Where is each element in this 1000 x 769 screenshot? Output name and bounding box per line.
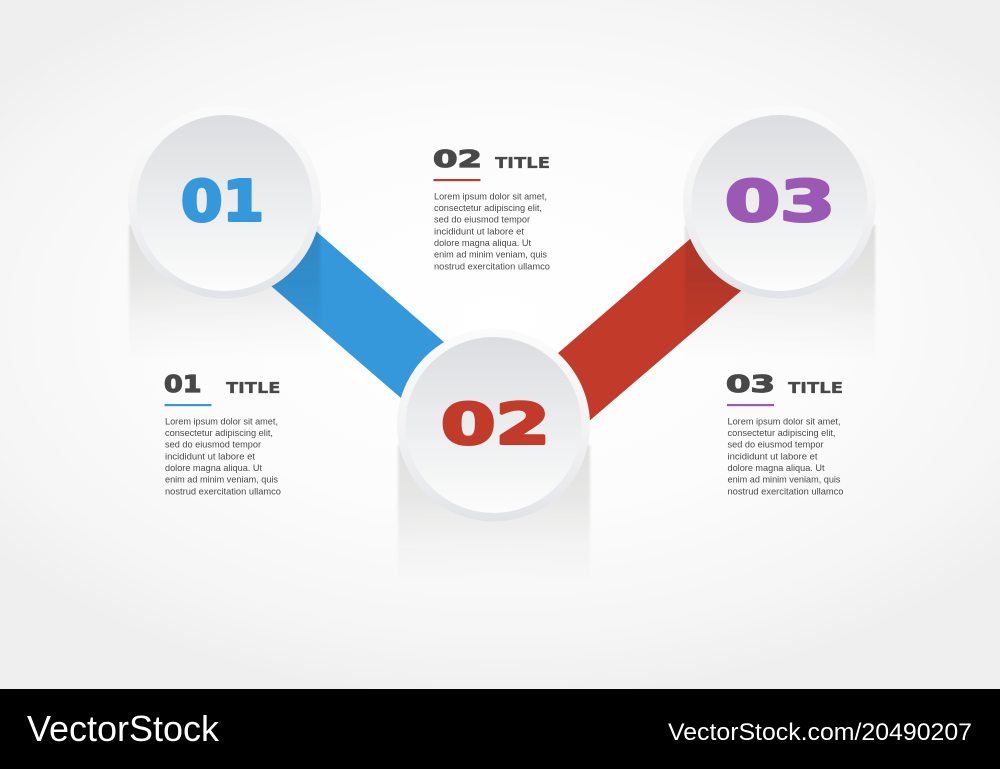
red connector band bbox=[535, 220, 763, 440]
body text 02: sed do eiusmod tempor bbox=[434, 215, 530, 225]
number 01: 01 bbox=[181, 170, 264, 234]
body text 02: enim ad minim veniam, quis bbox=[434, 250, 547, 260]
text block 01 bbox=[164, 370, 281, 496]
body text 03: consectetur adipiscing elit, bbox=[728, 428, 836, 438]
text block 03 bbox=[726, 370, 844, 496]
body text 02: Lorem ipsum dolor sit amet, bbox=[434, 192, 547, 202]
body text 02: consectetur adipiscing elit, bbox=[434, 203, 542, 213]
circle 03 bbox=[683, 106, 876, 298]
body text 01: dolore magna aliqua. Ut bbox=[165, 463, 262, 473]
body text 02: nostrud exercitation ullamco bbox=[434, 261, 550, 271]
body text 03: nostrud exercitation ullamco bbox=[728, 486, 844, 496]
underline 02 bbox=[434, 179, 480, 181]
heading number 03: 03 bbox=[726, 370, 775, 398]
body text 01: Lorem ipsum dolor sit amet, bbox=[165, 416, 278, 426]
body text 02 bbox=[434, 192, 550, 271]
circle 01 bbox=[128, 106, 321, 298]
body text 03 bbox=[728, 416, 844, 496]
shadow: circle 03 bbox=[685, 225, 875, 360]
heading number 01: 01 bbox=[164, 370, 202, 398]
body text 01: nostrud exercitation ullamco bbox=[165, 486, 281, 496]
footer logo text: VectorStock bbox=[27, 708, 220, 749]
footer url text: VectorStock.com/20490207 bbox=[668, 719, 972, 746]
body text 03: dolore magna aliqua. Ut bbox=[728, 463, 825, 473]
body text 01 bbox=[165, 416, 281, 496]
body text 02: incididunt ut labore et bbox=[434, 226, 524, 236]
heading number 02: 02 bbox=[433, 145, 482, 173]
text block 02 bbox=[433, 145, 550, 271]
body text 02: dolore magna aliqua. Ut bbox=[434, 238, 531, 248]
heading title 01: TITLE bbox=[226, 379, 280, 397]
body text 01: consectetur adipiscing elit, bbox=[165, 428, 273, 438]
number 03: 03 bbox=[725, 170, 835, 234]
circle 02 bbox=[397, 328, 590, 522]
body text 03: Lorem ipsum dolor sit amet, bbox=[728, 416, 840, 426]
shadow: circle 02 bbox=[398, 445, 590, 583]
heading title 02: TITLE bbox=[495, 154, 550, 172]
blue connector band bbox=[249, 212, 467, 417]
shadow: circle 01 bbox=[129, 225, 320, 360]
body text 01: sed do eiusmod tempor bbox=[165, 440, 261, 450]
body text 03: sed do eiusmod tempor bbox=[728, 440, 824, 450]
underline 03 bbox=[727, 404, 774, 406]
body text 01: incididunt ut labore et bbox=[165, 451, 255, 461]
number 02: 02 bbox=[441, 392, 550, 458]
body text 03: enim ad minim veniam, quis bbox=[728, 475, 841, 485]
body text 03: incididunt ut labore et bbox=[728, 451, 818, 461]
heading title 03: TITLE bbox=[788, 379, 843, 397]
underline 01 bbox=[164, 404, 212, 406]
body text 01: enim ad minim veniam, quis bbox=[165, 475, 278, 485]
footer bar bbox=[0, 689, 1000, 769]
